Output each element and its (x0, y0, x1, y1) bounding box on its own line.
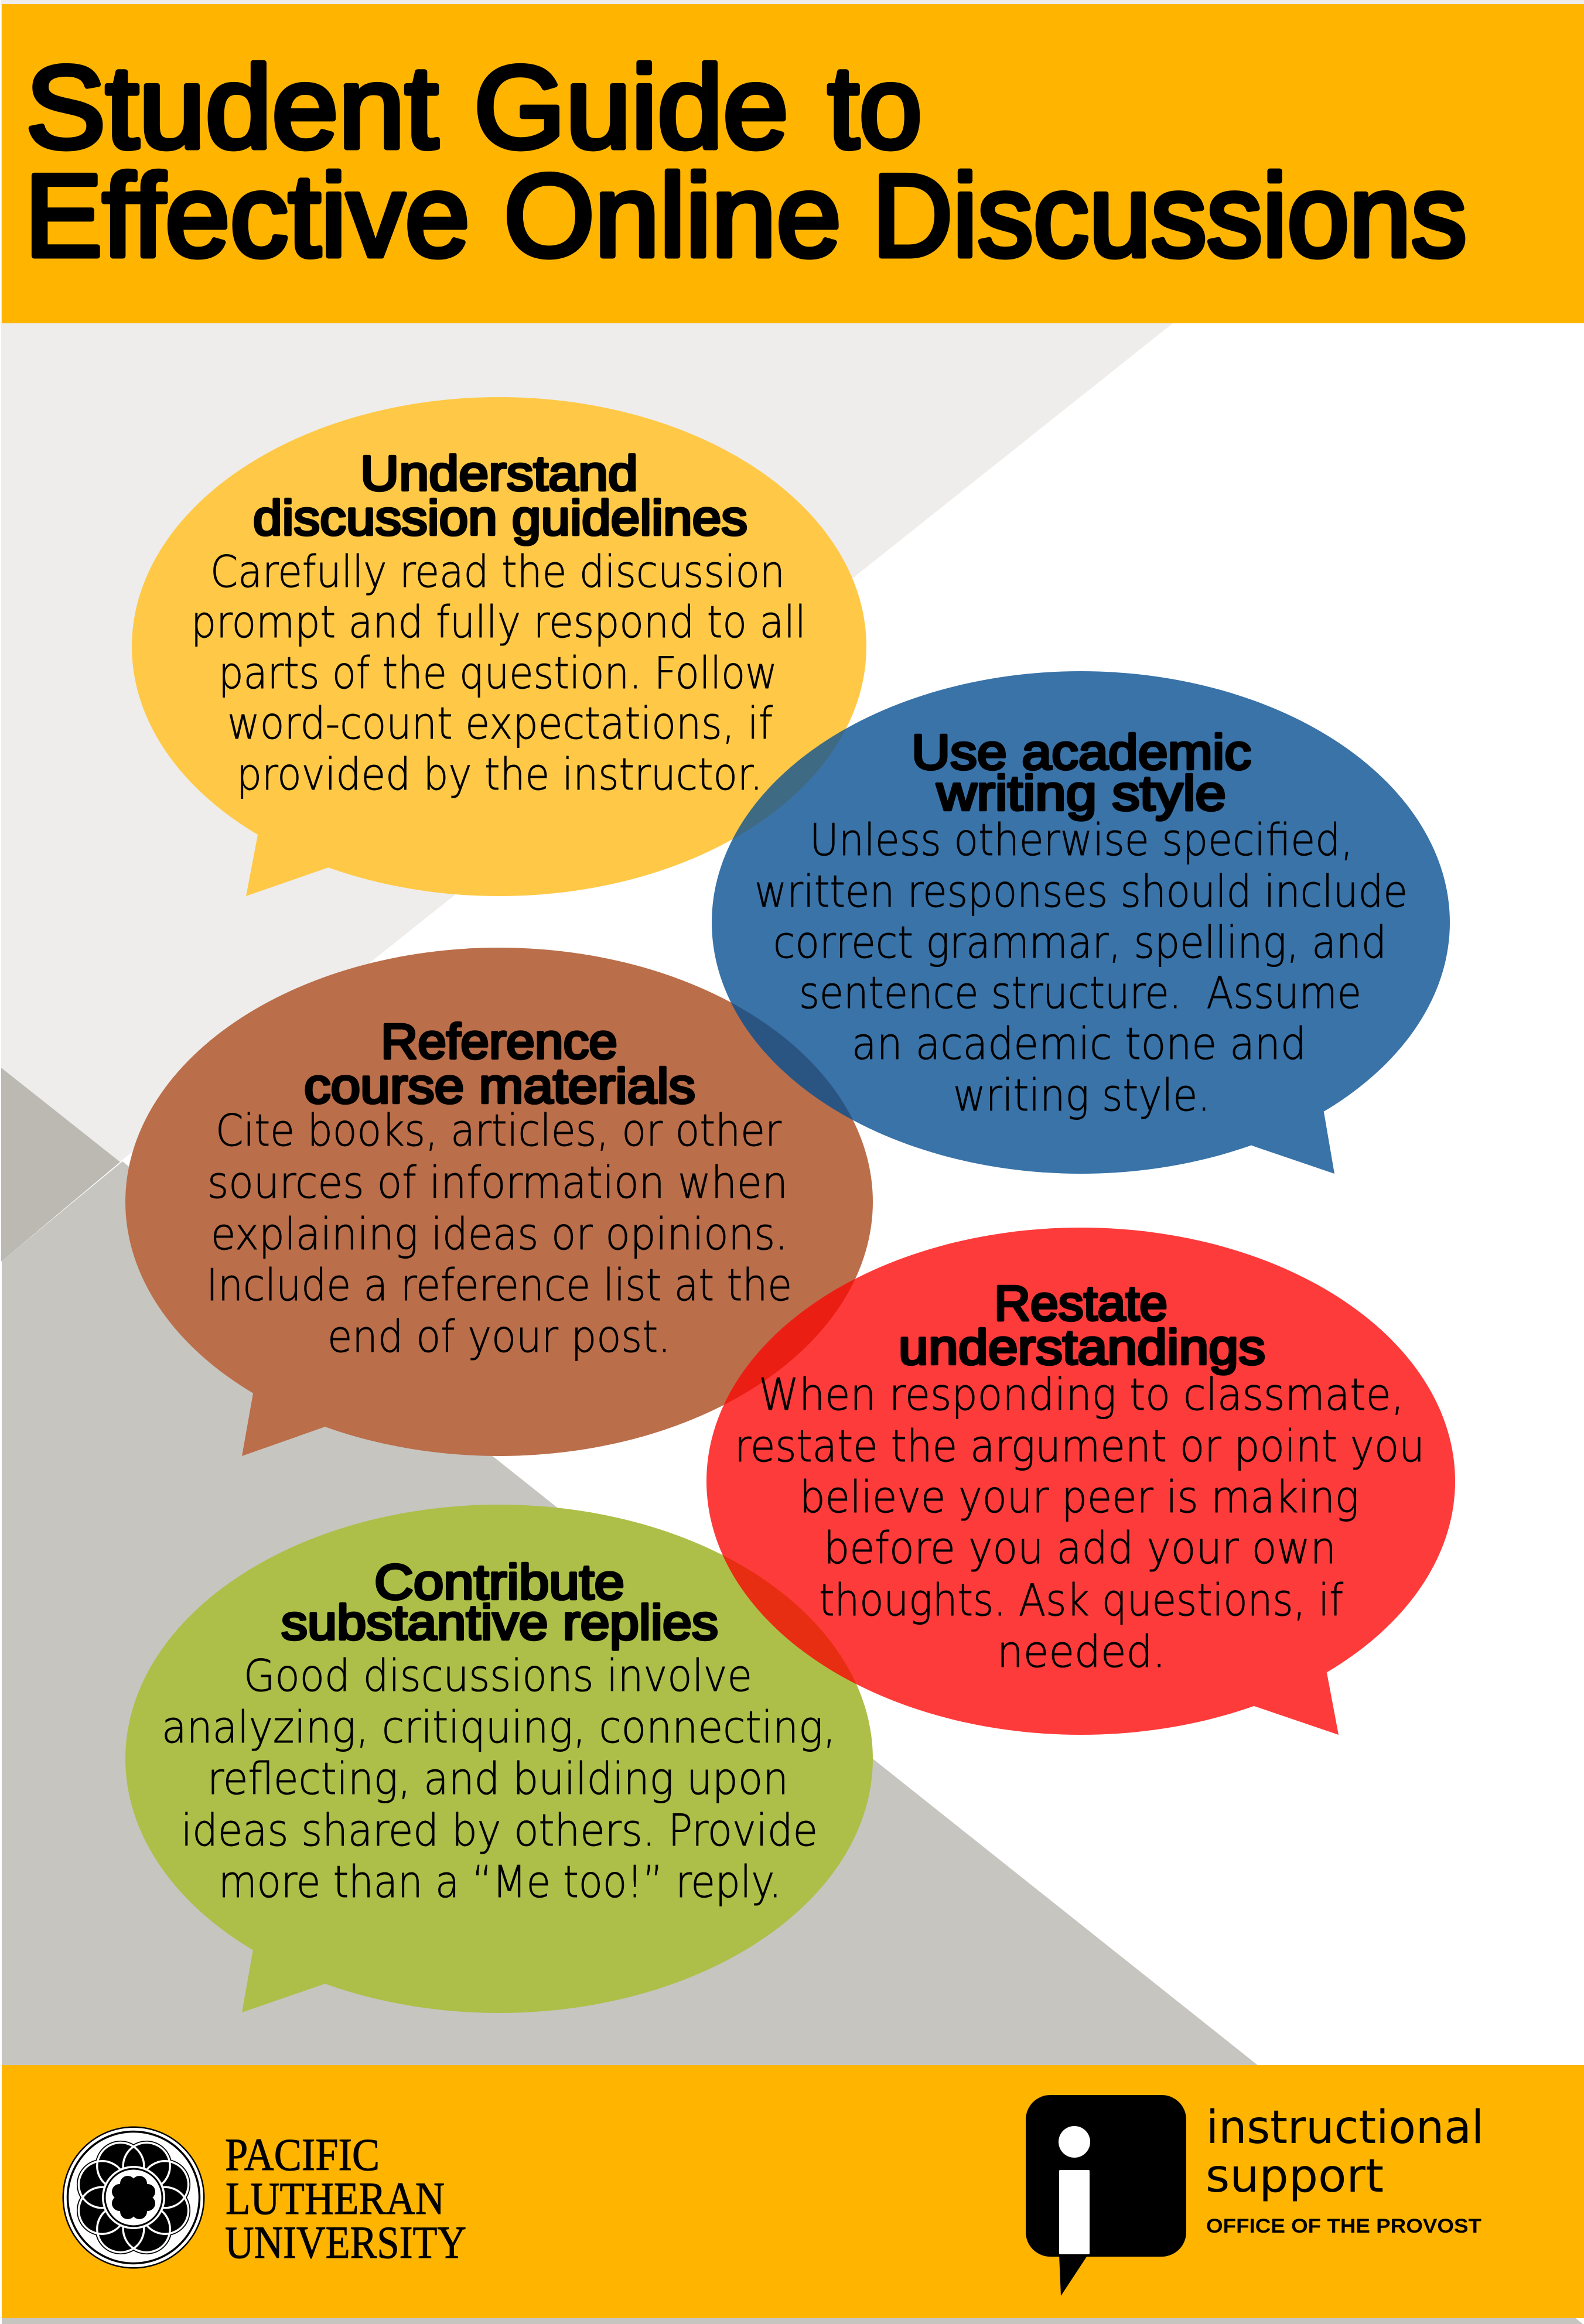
panel: use academic writing style (712, 671, 1450, 1174)
panel: understand discussion guidelines: parts of the question. Follow (219, 647, 777, 699)
instructional support wordmark: instructional (1206, 2101, 1484, 2154)
background: medium grey shard (2, 1161, 1583, 2324)
header band with title: Discussions (872, 151, 1467, 281)
panel: contribute substantive replies (125, 1505, 873, 2013)
panel: restate understandings: When responding to classmate, (759, 1369, 1404, 1420)
panel: reference course materials: explaining ideas or opinions. (211, 1208, 788, 1260)
panel: restate understandings: needed. (997, 1626, 1166, 1677)
instructional support wordmark: OFFICE OF THE PROVOST (1206, 2215, 1481, 2237)
panel: contribute substantive replies: substantive replies (281, 1595, 718, 1650)
panel: understand discussion guidelines: Carefully read the discussion (210, 546, 785, 597)
footer band (2, 2065, 1584, 2318)
panel: reference course materials: Reference (381, 1014, 617, 1069)
header band with title: Guide (474, 42, 788, 173)
background: light grey shard (1, 0, 1584, 1162)
panel: contribute substantive replies: ideas shared by others. Provide (181, 1804, 818, 1856)
panel: contribute substantive replies: more than a “Me too!” reply. (219, 1856, 781, 1908)
header band with title: Effective (25, 151, 470, 281)
header band with title: Student (26, 42, 438, 173)
header band with title: Online (504, 151, 841, 281)
icon: Pacific Lutheran University rosette seal (62, 2126, 205, 2269)
Pacific Lutheran University wordmark: PACIFIC (225, 2129, 380, 2180)
icon: instructional support speech bubble with letter i (1026, 2095, 1186, 2296)
panel: understand discussion guidelines: Understand (360, 446, 638, 501)
panel: reference course materials (125, 948, 873, 1456)
Pacific Lutheran University wordmark: LUTHERAN (226, 2173, 445, 2224)
panel: use academic writing style: Use academic (912, 724, 1251, 780)
panel: use academic writing style: Unless otherwise specified, (810, 814, 1353, 866)
panel: restate understandings (706, 1228, 1455, 1735)
panel: use academic writing style: sentence structure. Assume (799, 967, 1361, 1019)
panel: understand discussion guidelines: discussion guidelines (253, 490, 747, 545)
panel: reference course materials: Include a reference list at the (206, 1259, 792, 1311)
panel: reference course materials: sources of information when (207, 1157, 788, 1208)
panel: understand discussion guidelines: prompt and fully respond to all (191, 596, 806, 648)
instructional support wordmark (1206, 2101, 1484, 2237)
instructional support wordmark: support (1206, 2150, 1384, 2203)
panel: restate understandings: understandings (899, 1320, 1265, 1375)
panel: understand discussion guidelines (132, 397, 866, 896)
panel: restate understandings: believe your peer is making (800, 1471, 1359, 1523)
panel: restate understandings: before you add your own (824, 1522, 1336, 1574)
panel: contribute substantive replies: reflecting, and building upon (207, 1753, 788, 1804)
panel: contribute substantive replies: Contribute (374, 1554, 624, 1609)
panel: restate understandings: Restate (994, 1276, 1167, 1331)
panel: reference course materials: end of your post. (327, 1311, 671, 1362)
panel: restate understandings: restate the argument or point you (735, 1420, 1425, 1472)
panel: contribute substantive replies: Good discussions involve (244, 1650, 752, 1701)
panel: use academic writing style: an academic tone and (852, 1018, 1306, 1069)
panel: use academic writing style: writing style (936, 765, 1226, 821)
panel: contribute substantive replies: analyzing, critiquing, connecting, (162, 1701, 836, 1753)
panel: understand discussion guidelines: word-count expectations, if (227, 698, 773, 749)
panel: use academic writing style: writing style. (953, 1069, 1210, 1121)
Pacific Lutheran University wordmark (225, 2129, 466, 2268)
background: dark grey triangle (1, 1068, 120, 1262)
panel: restate understandings: thoughts. Ask questions, if (819, 1574, 1344, 1626)
panel: use academic writing style: correct grammar, spelling, and (773, 917, 1387, 968)
panel: reference course materials: Cite books, articles, or other (216, 1105, 781, 1156)
header band with title: to (828, 42, 922, 173)
panel: understand discussion guidelines: provided by the instructor. (237, 749, 763, 800)
header band with title (2, 4, 1584, 323)
panel: reference course materials: course materials (304, 1058, 695, 1113)
Pacific Lutheran University wordmark: UNIVERSITY (225, 2217, 466, 2268)
panel: use academic writing style: written responses should include (755, 866, 1408, 917)
